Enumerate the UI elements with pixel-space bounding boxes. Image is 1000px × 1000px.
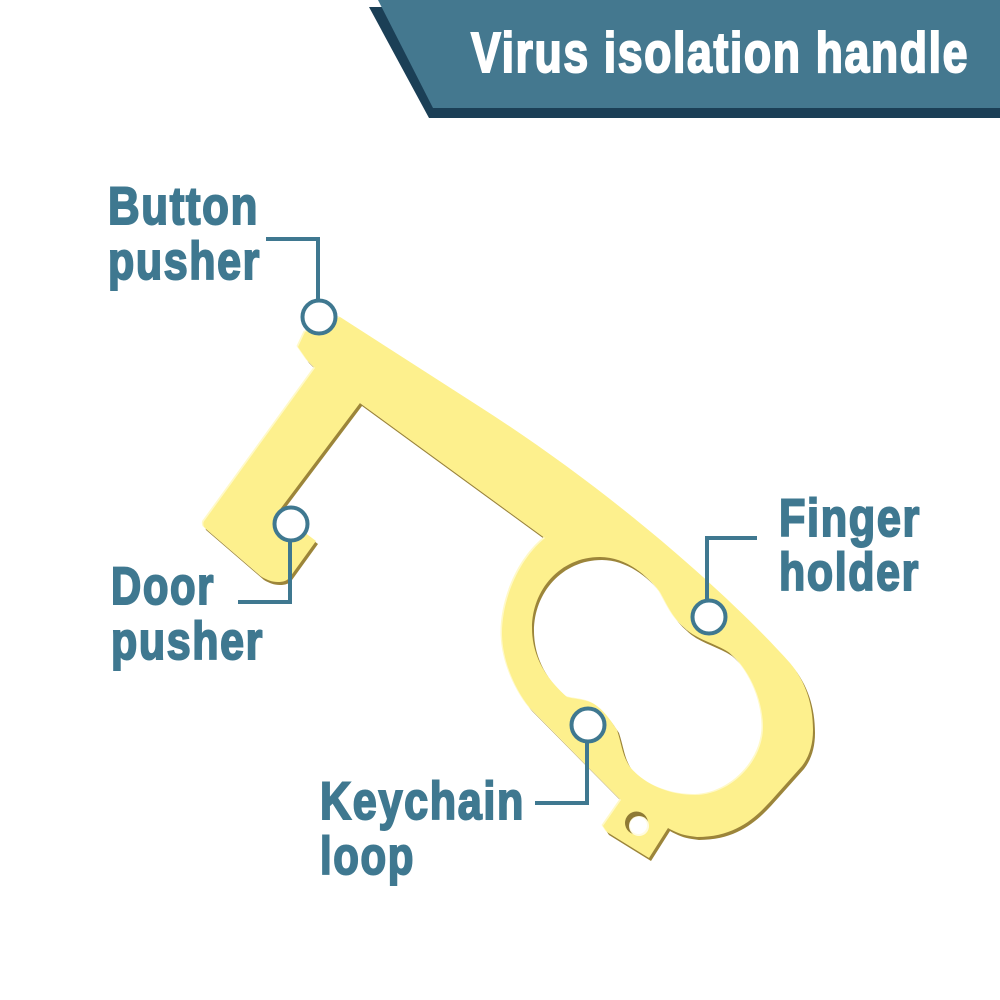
label: door pusher — [111, 508, 308, 671]
label: button pusher — [108, 177, 336, 334]
label: keychain loop — [320, 708, 604, 886]
label: keychain loop: loop — [320, 827, 415, 886]
label: keychain loop: Keychain — [320, 772, 525, 831]
label: finger holder: Finger — [779, 489, 921, 548]
label: button pusher: pusher — [108, 232, 261, 291]
handle tool — [202, 316, 815, 861]
label: finger holder — [692, 489, 921, 634]
header banner — [369, 0, 1000, 118]
label: door pusher: Door — [111, 557, 215, 616]
label: button pusher: Button — [108, 177, 259, 236]
label: door pusher: pusher — [111, 612, 264, 671]
label: finger holder: holder — [779, 543, 920, 602]
